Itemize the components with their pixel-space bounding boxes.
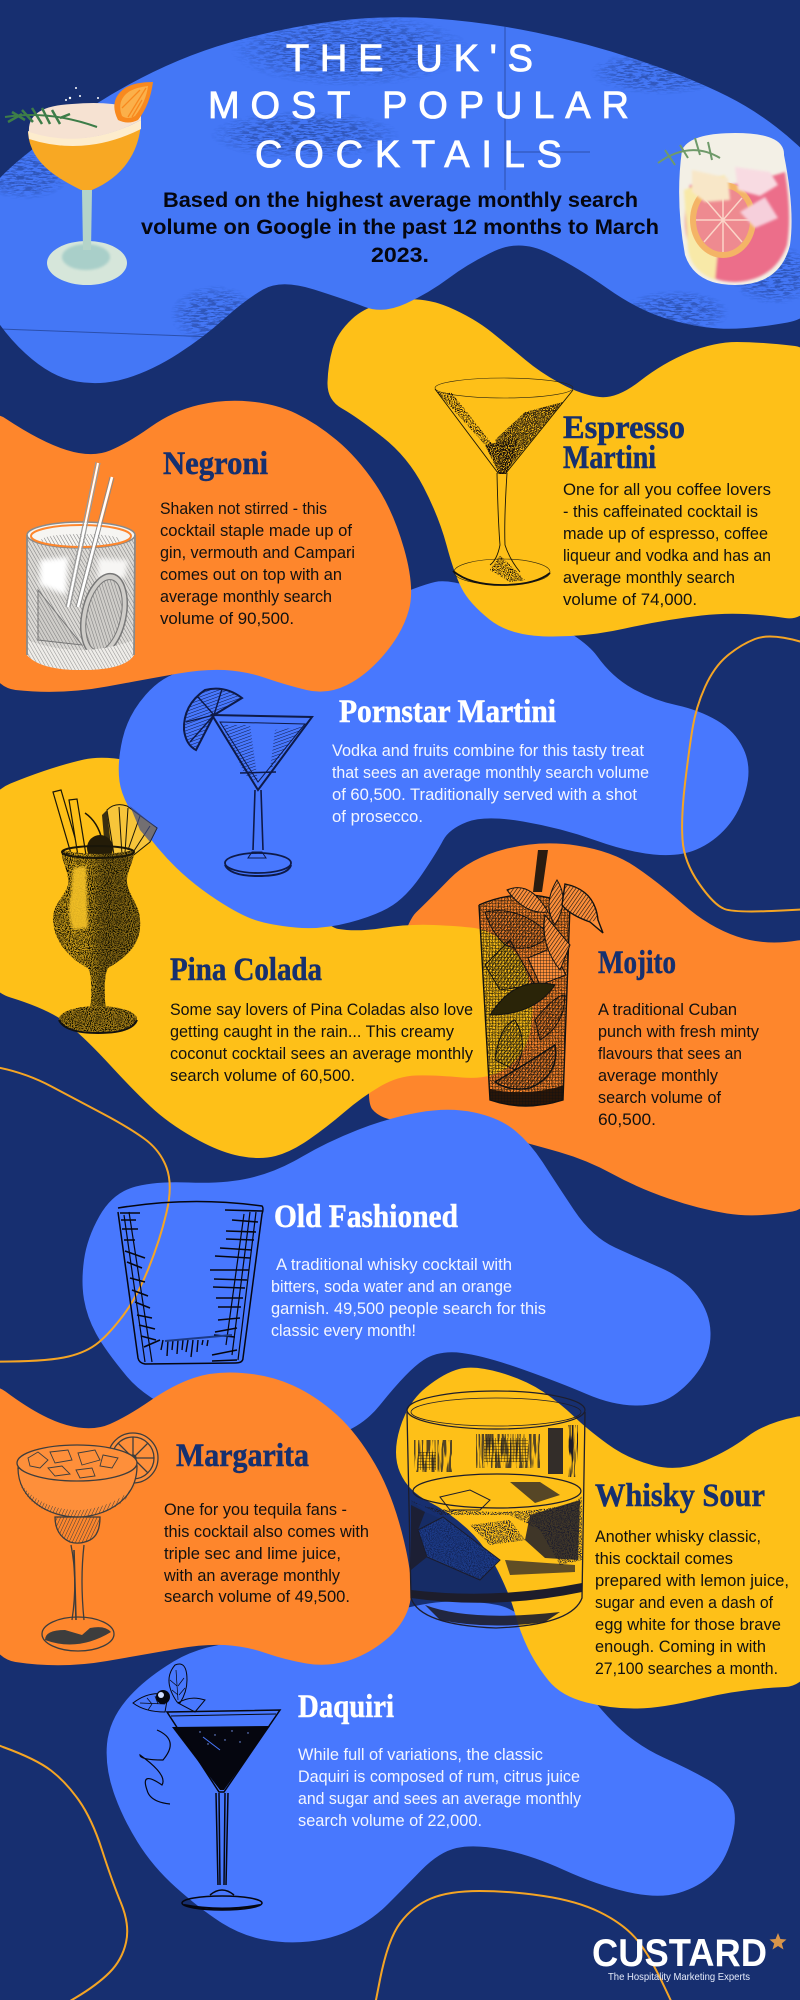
text: margarita: with an average monthly (163, 1567, 341, 1585)
text: negroni: Shaken not stirred - this (160, 500, 327, 518)
text: mojito: flavours that sees an (598, 1045, 742, 1063)
panel: negroni background blob (0, 401, 411, 692)
text: negroni: average monthly search (160, 588, 332, 606)
logo wordmark: CUSTARD (592, 1932, 767, 1975)
heading: margarita: Margarita (176, 1438, 309, 1474)
icon: mojito glass (475, 850, 603, 1115)
heading: espresso martini: Martini (563, 440, 656, 476)
subtitle text block: volume on Google in the past 12 months to March (141, 216, 659, 239)
panel content: pina colada (53, 790, 474, 1085)
icon: martini glass (435, 378, 573, 585)
text: whisky sour: 27,100 searches a month. (595, 1660, 778, 1678)
icon: margarita glass (17, 1433, 158, 1651)
heading: pornstar martini: Pornstar Martini (339, 694, 556, 730)
panel: daquiri background blob (107, 1601, 735, 1942)
icon: orange coupe cocktail (5, 82, 153, 285)
panel: header blob (0, 12, 800, 383)
panel: old fashioned background blob (82, 1110, 711, 1440)
icon: pornstar martini glass (184, 689, 312, 876)
text: whisky sour: this cocktail comes (595, 1550, 733, 1568)
title: COCKTAILS (255, 134, 562, 176)
text: mojito: average monthly (598, 1067, 719, 1085)
heading: old fashioned: Old Fashioned (274, 1199, 458, 1235)
text: old fashioned: A traditional whisky cocktail with (276, 1256, 512, 1274)
heading: daquiri: Daquiri (298, 1689, 394, 1725)
panel content: old fashioned (118, 1199, 546, 1364)
text: whisky sour (595, 1528, 789, 1678)
text: pornstar martini: of 60,500. Traditionally served with a shot (332, 786, 637, 804)
panel content: margarita (17, 1433, 369, 1651)
logo: custard (592, 1932, 786, 1983)
text: negroni: comes out on top with an (160, 566, 342, 584)
text: mojito (598, 1001, 760, 1129)
heading: negroni: Negroni (163, 446, 268, 482)
panel content: daquiri (133, 1664, 582, 1910)
text: espresso martini: average monthly search (563, 569, 735, 587)
icon: pink grapefruit tumbler (658, 133, 792, 285)
text: margarita: One for you tequila fans - (164, 1501, 347, 1519)
icon: hurricane glass (53, 790, 157, 1033)
gold line: right curve (682, 637, 800, 911)
title: MOST POPULAR (208, 85, 629, 127)
icon: whisky tumbler (407, 1391, 585, 1628)
panel content: pornstar martini (184, 689, 649, 876)
text: margarita (163, 1501, 369, 1606)
heading: mojito: Mojito (598, 945, 676, 981)
text: espresso martini: One for all you coffee lovers (563, 481, 771, 499)
icon: old fashioned glass (118, 1201, 263, 1364)
text: pina colada: coconut cocktail sees an average monthly (170, 1045, 474, 1063)
gold line: lower left curve (0, 1741, 127, 2000)
text: espresso martini: volume of 74,000. (563, 591, 697, 609)
text: pornstar martini (332, 742, 649, 826)
text: old fashioned (271, 1256, 546, 1340)
text: old fashioned: classic every month! (271, 1322, 416, 1340)
subtitle text block: Based on the highest average monthly search (163, 189, 638, 212)
panel: whisky sour background blob (396, 1368, 800, 1709)
text: espresso martini (563, 481, 771, 609)
text: pornstar martini: Vodka and fruits combine for this tasty treat (332, 742, 644, 760)
text: daquiri: While full of variations, the classic (298, 1746, 543, 1764)
text: daquiri: search volume of 22,000. (298, 1812, 482, 1830)
text: old fashioned: garnish. 49,500 people search for this (271, 1300, 546, 1318)
text: whisky sour: prepared with lemon juice, (595, 1572, 789, 1590)
gold line: left curve (0, 1065, 170, 1362)
heading: espresso martini: Espresso (563, 410, 685, 446)
icon: negroni glass (27, 462, 135, 670)
heading: espresso martini (563, 410, 685, 476)
panel content: mojito (475, 850, 760, 1129)
text: negroni (160, 500, 355, 628)
text: mojito: search volume of (598, 1089, 721, 1107)
text: daquiri: and sugar and sees an average monthly (298, 1790, 582, 1808)
text: pina colada (170, 1001, 474, 1085)
panel: pornstar martini background blob (119, 581, 748, 928)
panel content: whisky sour (407, 1391, 789, 1678)
panel: pina colada background blob (0, 758, 532, 1158)
panel: margarita background blob (0, 1373, 411, 1665)
text: daquiri: Daquiri is composed of rum, citrus juice (298, 1768, 580, 1786)
panel: espresso martini background blob (327, 299, 800, 637)
heading: whisky sour: Whisky Sour (595, 1478, 765, 1514)
panel: mojito background blob (369, 843, 800, 1215)
panel content: negroni (27, 446, 355, 670)
subtitle text block: 2023. (371, 244, 429, 267)
text: negroni: cocktail staple made up of (160, 522, 352, 540)
text: pornstar martini: that sees an average monthly search volume (332, 764, 649, 782)
text: whisky sour: egg white for those brave (595, 1616, 781, 1634)
text: margarita: triple sec and lime juice, (164, 1545, 341, 1563)
text: whisky sour: Another whisky classic, (595, 1528, 761, 1546)
text: mojito: 60,500. (598, 1111, 656, 1129)
subtitle text block (141, 189, 659, 267)
text: negroni: gin, vermouth and Campari (160, 544, 355, 562)
text: pina colada: getting caught in the rain... This creamy (170, 1023, 455, 1041)
title (208, 38, 629, 176)
text: pornstar martini: of prosecco. (332, 808, 423, 826)
text: mojito: punch with fresh minty (598, 1023, 760, 1041)
text: espresso martini: liqueur and vodka and has an (563, 547, 771, 565)
text: whisky sour: enough. Coming in with (595, 1638, 766, 1656)
gold line: bottom right curve (375, 1891, 680, 2000)
logo tagline: The Hospitality Marketing Experts (608, 1971, 750, 1983)
text: pina colada: Some say lovers of Pina Coladas also love (170, 1001, 473, 1019)
text: mojito: A traditional Cuban (598, 1001, 737, 1019)
text: espresso martini: made up of espresso, coffee (563, 525, 768, 543)
text: negroni: volume of 90,500. (160, 610, 294, 628)
title: THE UK'S (286, 38, 533, 80)
text: margarita: search volume of 49,500. (164, 1588, 350, 1606)
text: daquiri (298, 1746, 582, 1830)
icon: logo star (770, 1933, 786, 1950)
panel content: espresso martini (435, 378, 771, 609)
heading: pina colada: Pina Colada (170, 952, 322, 988)
text: pina colada: search volume of 60,500. (170, 1067, 355, 1085)
icon: daquiri martini glass (133, 1664, 280, 1910)
text: espresso martini: - this caffeinated cocktail is (563, 503, 758, 521)
text: whisky sour: sugar and even a dash of (595, 1594, 773, 1612)
text: old fashioned: bitters, soda water and an orange (271, 1278, 512, 1296)
text: margarita: this cocktail also comes with (164, 1523, 369, 1541)
